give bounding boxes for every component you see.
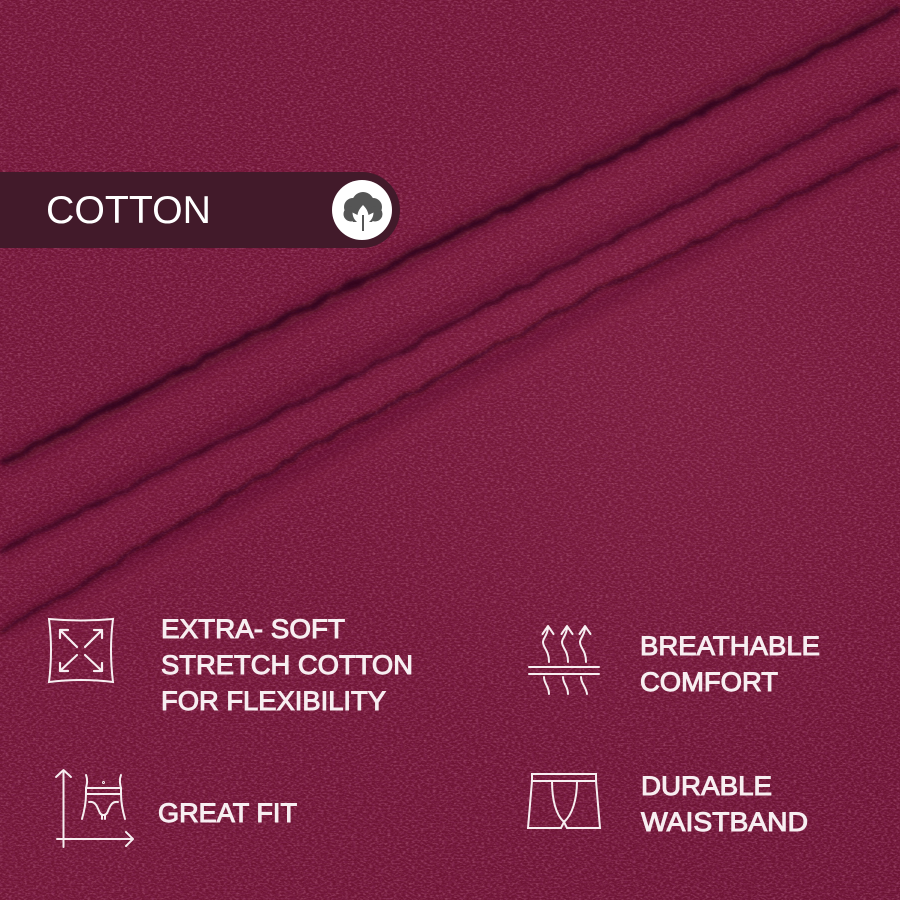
cotton banner	[0, 172, 400, 248]
text: extra-soft stretch cotton: STRETCH COTTON	[161, 650, 413, 680]
icon: stretch square	[49, 619, 113, 682]
icon: cotton boll	[332, 180, 392, 240]
text: breathable comfort	[640, 631, 820, 697]
banner title: COTTON	[46, 189, 211, 232]
text: durable waistband: DURABLE	[641, 771, 772, 801]
fabric fold lines	[0, 6, 900, 650]
text: durable waistband	[641, 771, 808, 837]
text: breathable comfort: BREATHABLE	[640, 631, 820, 661]
icon: great fit	[56, 770, 133, 847]
text: breathable comfort: COMFORT	[640, 667, 778, 697]
text: great fit: GREAT FIT	[158, 798, 297, 828]
icon: breathable layers	[529, 626, 599, 694]
text: extra-soft stretch cotton: FOR FLEXIBILITY	[161, 686, 386, 716]
text: extra-soft stretch cotton: EXTRA- SOFT	[161, 614, 345, 644]
icon: boxer waistband	[528, 774, 600, 828]
text: extra-soft stretch cotton	[161, 614, 413, 716]
text: durable waistband: WAISTBAND	[641, 807, 808, 837]
